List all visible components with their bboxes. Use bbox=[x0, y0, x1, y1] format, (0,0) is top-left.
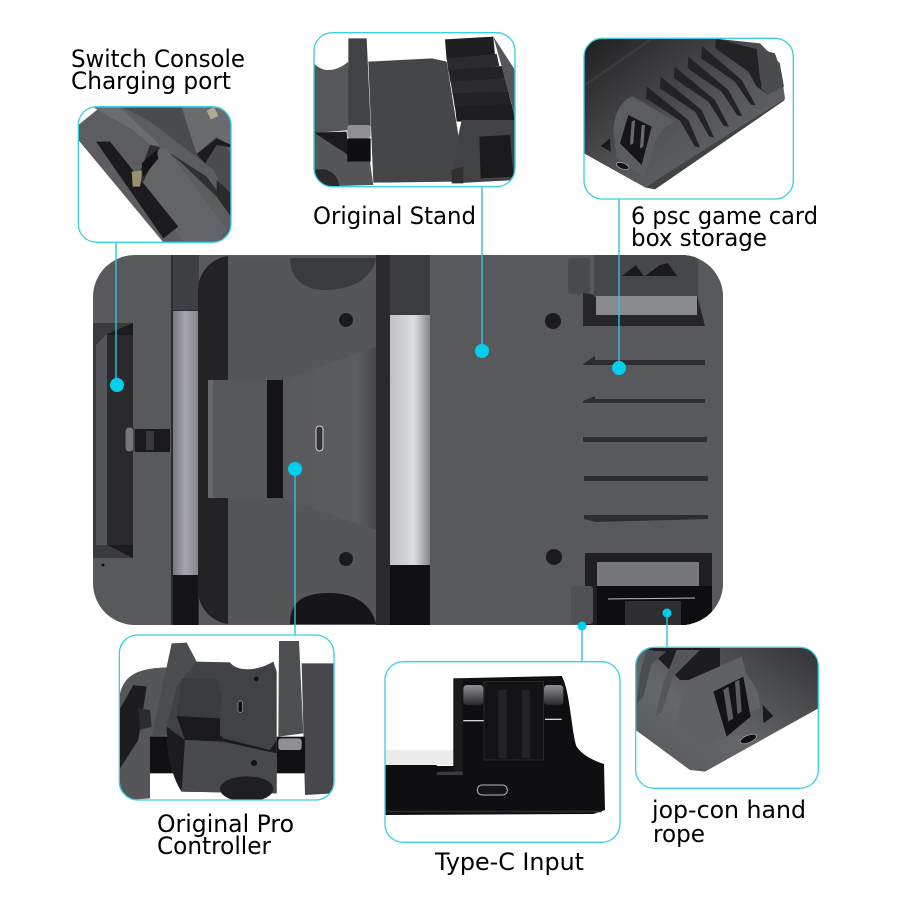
heading: game card storage bbox=[631, 202, 818, 252]
main product: charging stand top view bbox=[93, 255, 723, 625]
panel: original stand bbox=[314, 33, 515, 187]
pro controller plate bbox=[290, 258, 376, 624]
left pro controller area bbox=[314, 62, 350, 133]
callout markers bbox=[110, 344, 672, 630]
heading: original pro controller: Controller bbox=[157, 832, 271, 860]
bridge gap bbox=[267, 380, 283, 498]
left upright bbox=[152, 643, 197, 737]
center plate bbox=[167, 662, 277, 793]
heading: type-c input: Type-C Input bbox=[434, 848, 584, 876]
bottom joy-con block bbox=[571, 553, 712, 625]
upright column bbox=[348, 38, 371, 127]
stand plate bbox=[368, 58, 463, 183]
card fins bbox=[646, 38, 767, 147]
heading: joy-con hand rope bbox=[651, 796, 806, 848]
panel: joy-con hand rope bbox=[636, 647, 818, 788]
pro controller USB-C wedge bbox=[316, 347, 376, 530]
front joy-con block bbox=[453, 120, 515, 183]
USB-C port bbox=[740, 734, 757, 744]
game card slots bbox=[583, 356, 708, 522]
heading: switch console charging port: Charging port bbox=[71, 67, 231, 95]
pro controller left block bbox=[208, 380, 228, 498]
panel: type-c input bbox=[385, 662, 620, 842]
panel: switch console charging port bbox=[78, 107, 231, 242]
base bbox=[119, 667, 167, 800]
heading: original pro controller bbox=[157, 810, 294, 860]
USB-C port bbox=[477, 785, 507, 795]
heading: game card storage: box storage bbox=[631, 224, 767, 252]
heading: original stand: Original Stand bbox=[313, 202, 476, 230]
panel: original pro controller bbox=[119, 635, 334, 802]
base surface bbox=[584, 38, 785, 187]
heading: original pro controller: Original Pro bbox=[157, 810, 294, 838]
heading: joy-con hand rope: rope bbox=[653, 820, 705, 848]
heading: game card storage: 6 psc game card bbox=[631, 202, 818, 230]
original stand plate bbox=[684, 255, 723, 625]
console charging slot bbox=[93, 323, 133, 566]
dark inner wall bbox=[198, 256, 228, 624]
heading: switch console charging port bbox=[71, 45, 245, 95]
USB-C port bbox=[616, 162, 630, 170]
heading: joy-con hand rope: jop-con hand bbox=[651, 796, 806, 824]
left glossy column with window bbox=[171, 255, 199, 625]
right upright bbox=[278, 641, 303, 737]
console USB-C connector bbox=[125, 427, 170, 452]
mounting screws bbox=[339, 313, 562, 566]
card fins bbox=[445, 37, 495, 60]
heading: switch console charging port: Switch Console bbox=[71, 45, 245, 73]
front joy-con block bbox=[614, 96, 674, 165]
top joy-con block bbox=[568, 255, 705, 326]
panel: game card box storage bbox=[584, 38, 793, 199]
right glossy column with window bbox=[376, 255, 430, 625]
